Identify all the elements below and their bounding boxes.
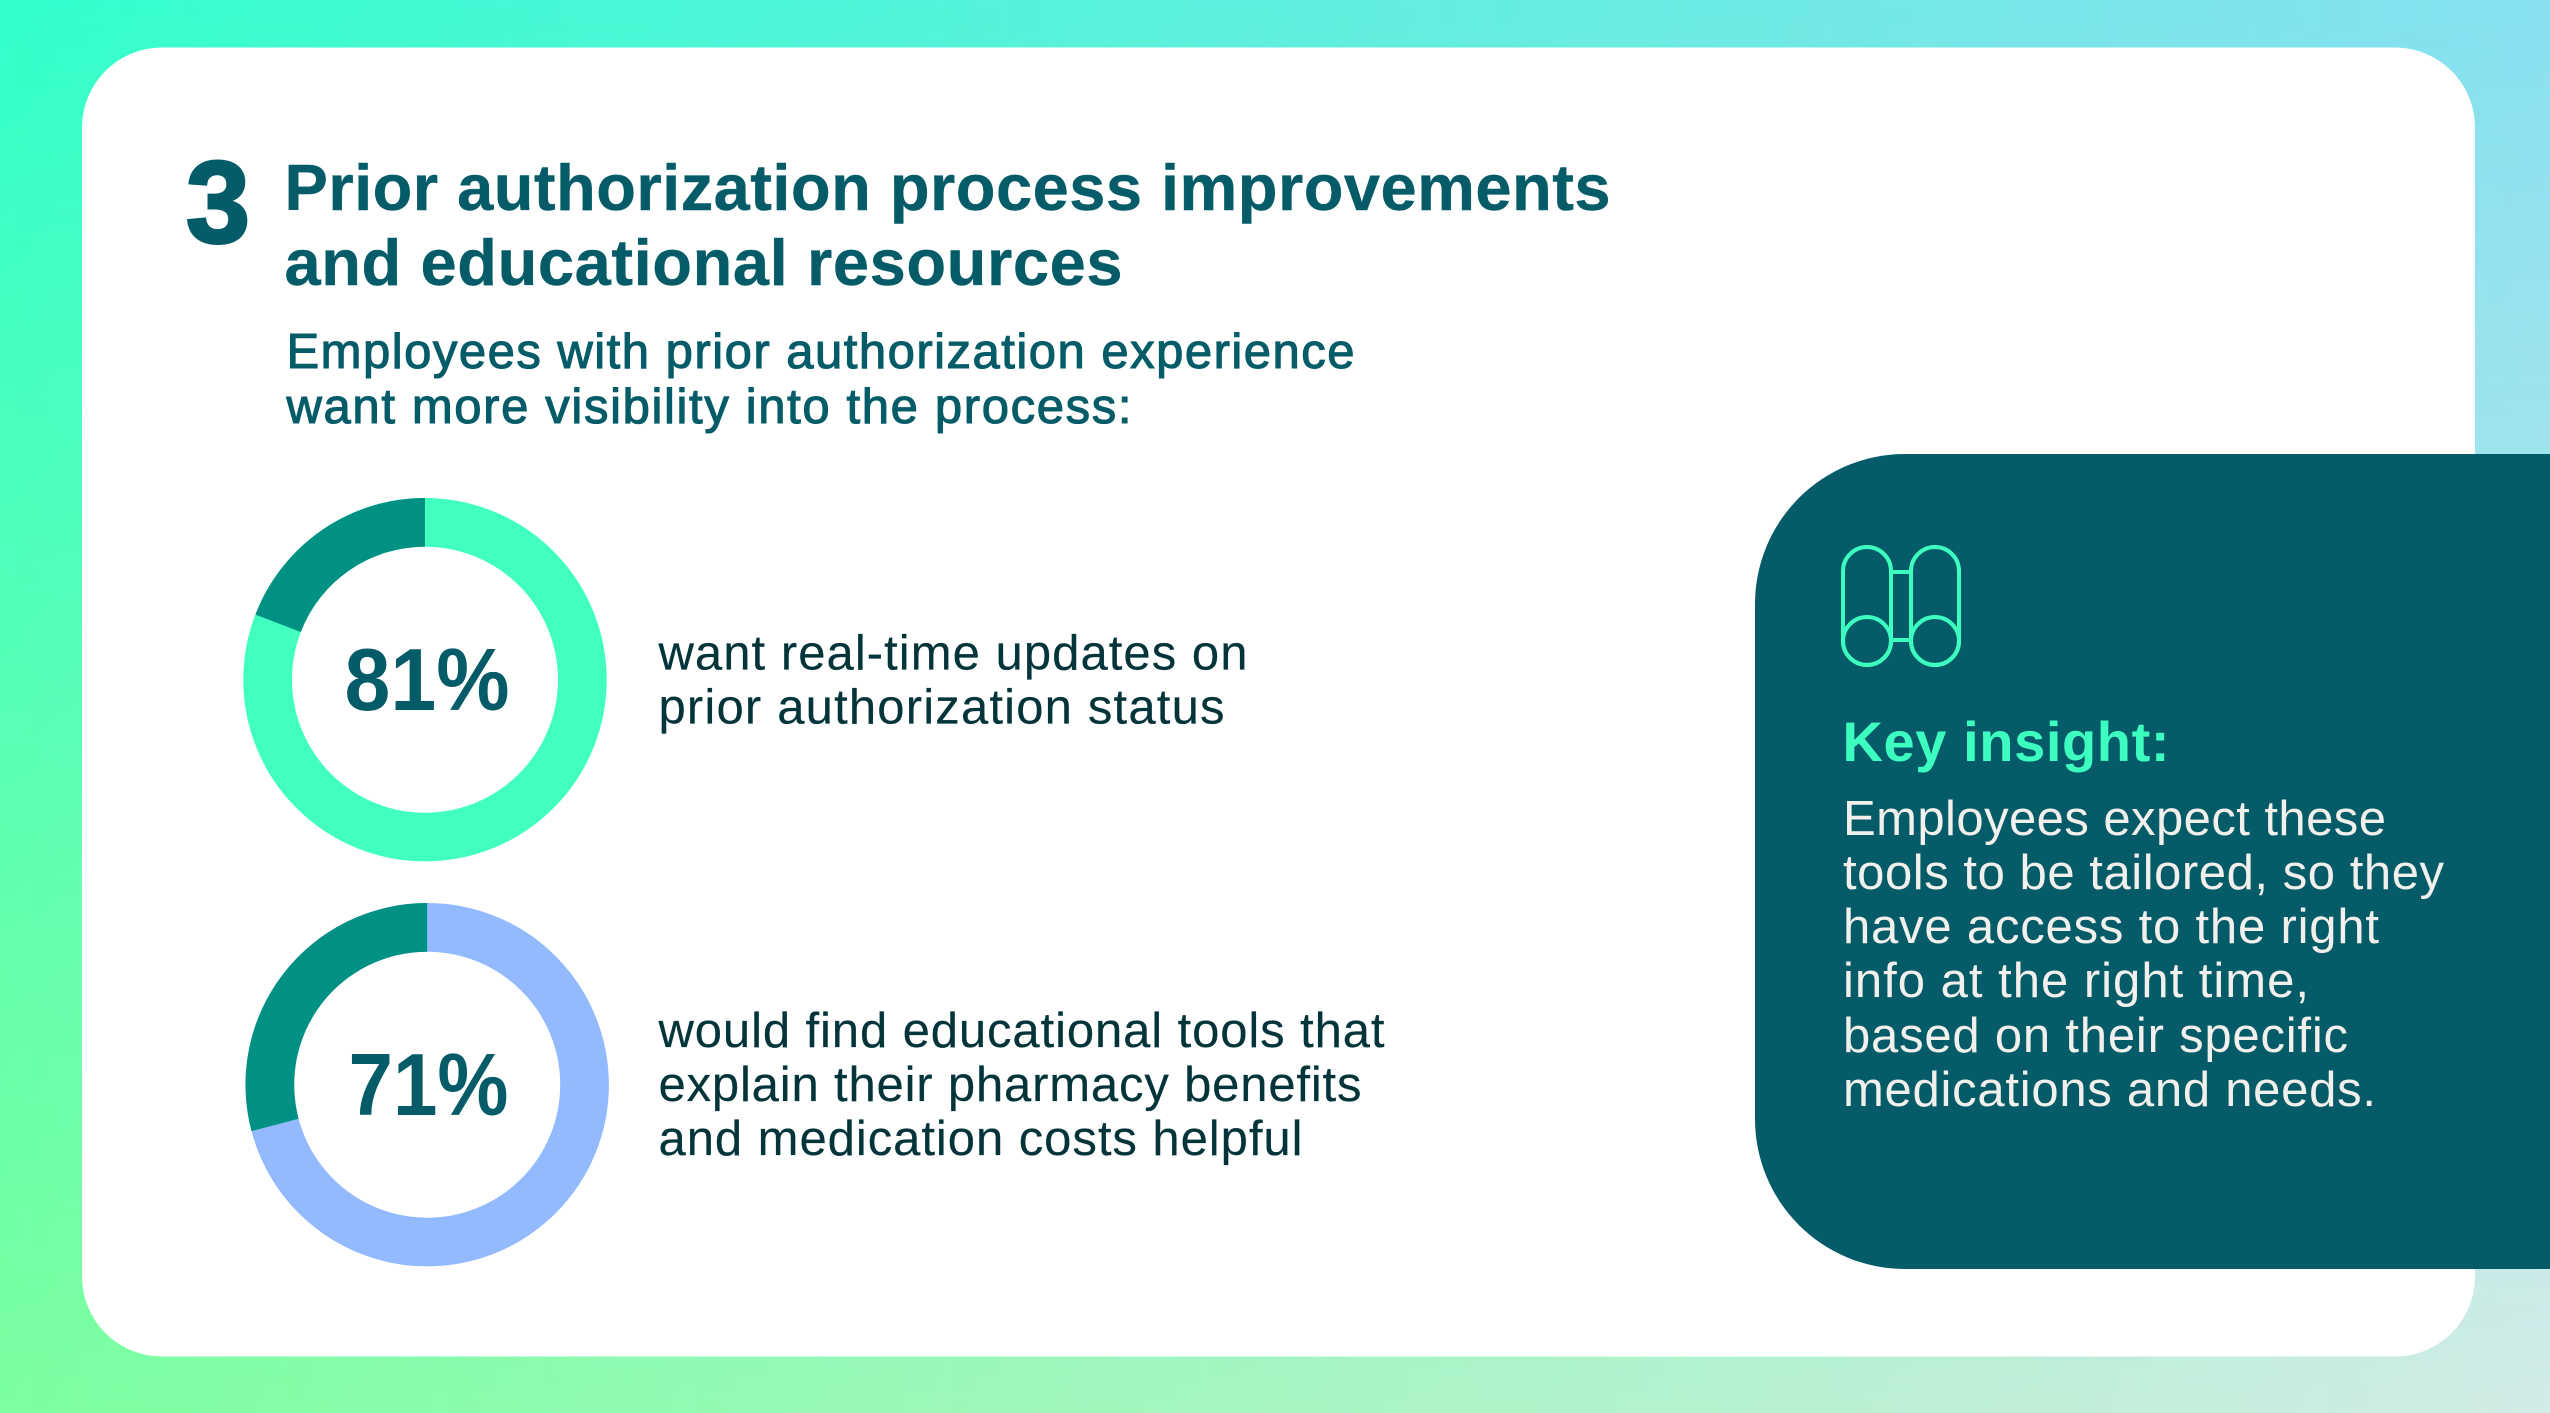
subheading: Employees with prior authorization experience <box>286 325 1354 379</box>
text: 81% description: want real-time updates on <box>658 626 1248 680</box>
text: 71% description: and medication costs helpful <box>658 1112 1302 1166</box>
section number 3: 3 <box>186 137 250 267</box>
value: 71%: 71% <box>348 1035 508 1134</box>
icon: binoculars <box>1843 547 1959 665</box>
subheading <box>286 325 1354 434</box>
text: key insight body: info at the right time, <box>1843 954 2309 1008</box>
subheading: want more visibility into the process: <box>286 380 1132 434</box>
text: key insight body: Employees expect these <box>1843 792 2386 846</box>
text: key insight body: medications and needs. <box>1843 1063 2376 1117</box>
panel: key insight <box>1755 454 2550 1269</box>
text: key insight body: based on their specific <box>1843 1009 2348 1063</box>
heading: key insight: Key insight: <box>1842 710 2170 773</box>
text: 71% description: explain their pharmacy benefits <box>658 1058 1362 1112</box>
donut chart: 81% <box>255 498 582 837</box>
text: key insight body: tools to be tailored, so they <box>1843 846 2444 900</box>
text: 71% description <box>658 1004 1385 1166</box>
text: key insight body: have access to the right <box>1843 900 2379 954</box>
text: 71% description: would find educational tools that <box>658 1004 1385 1058</box>
title <box>284 151 1610 299</box>
text: key insight body <box>1843 792 2444 1117</box>
title: and educational resources <box>284 226 1122 299</box>
title: Prior authorization process improvements <box>284 151 1610 224</box>
text: 81% description <box>658 626 1248 734</box>
value: 81%: 81% <box>344 630 510 729</box>
text: 81% description: prior authorization status <box>658 680 1224 734</box>
donut chart: 71% <box>245 903 585 1242</box>
